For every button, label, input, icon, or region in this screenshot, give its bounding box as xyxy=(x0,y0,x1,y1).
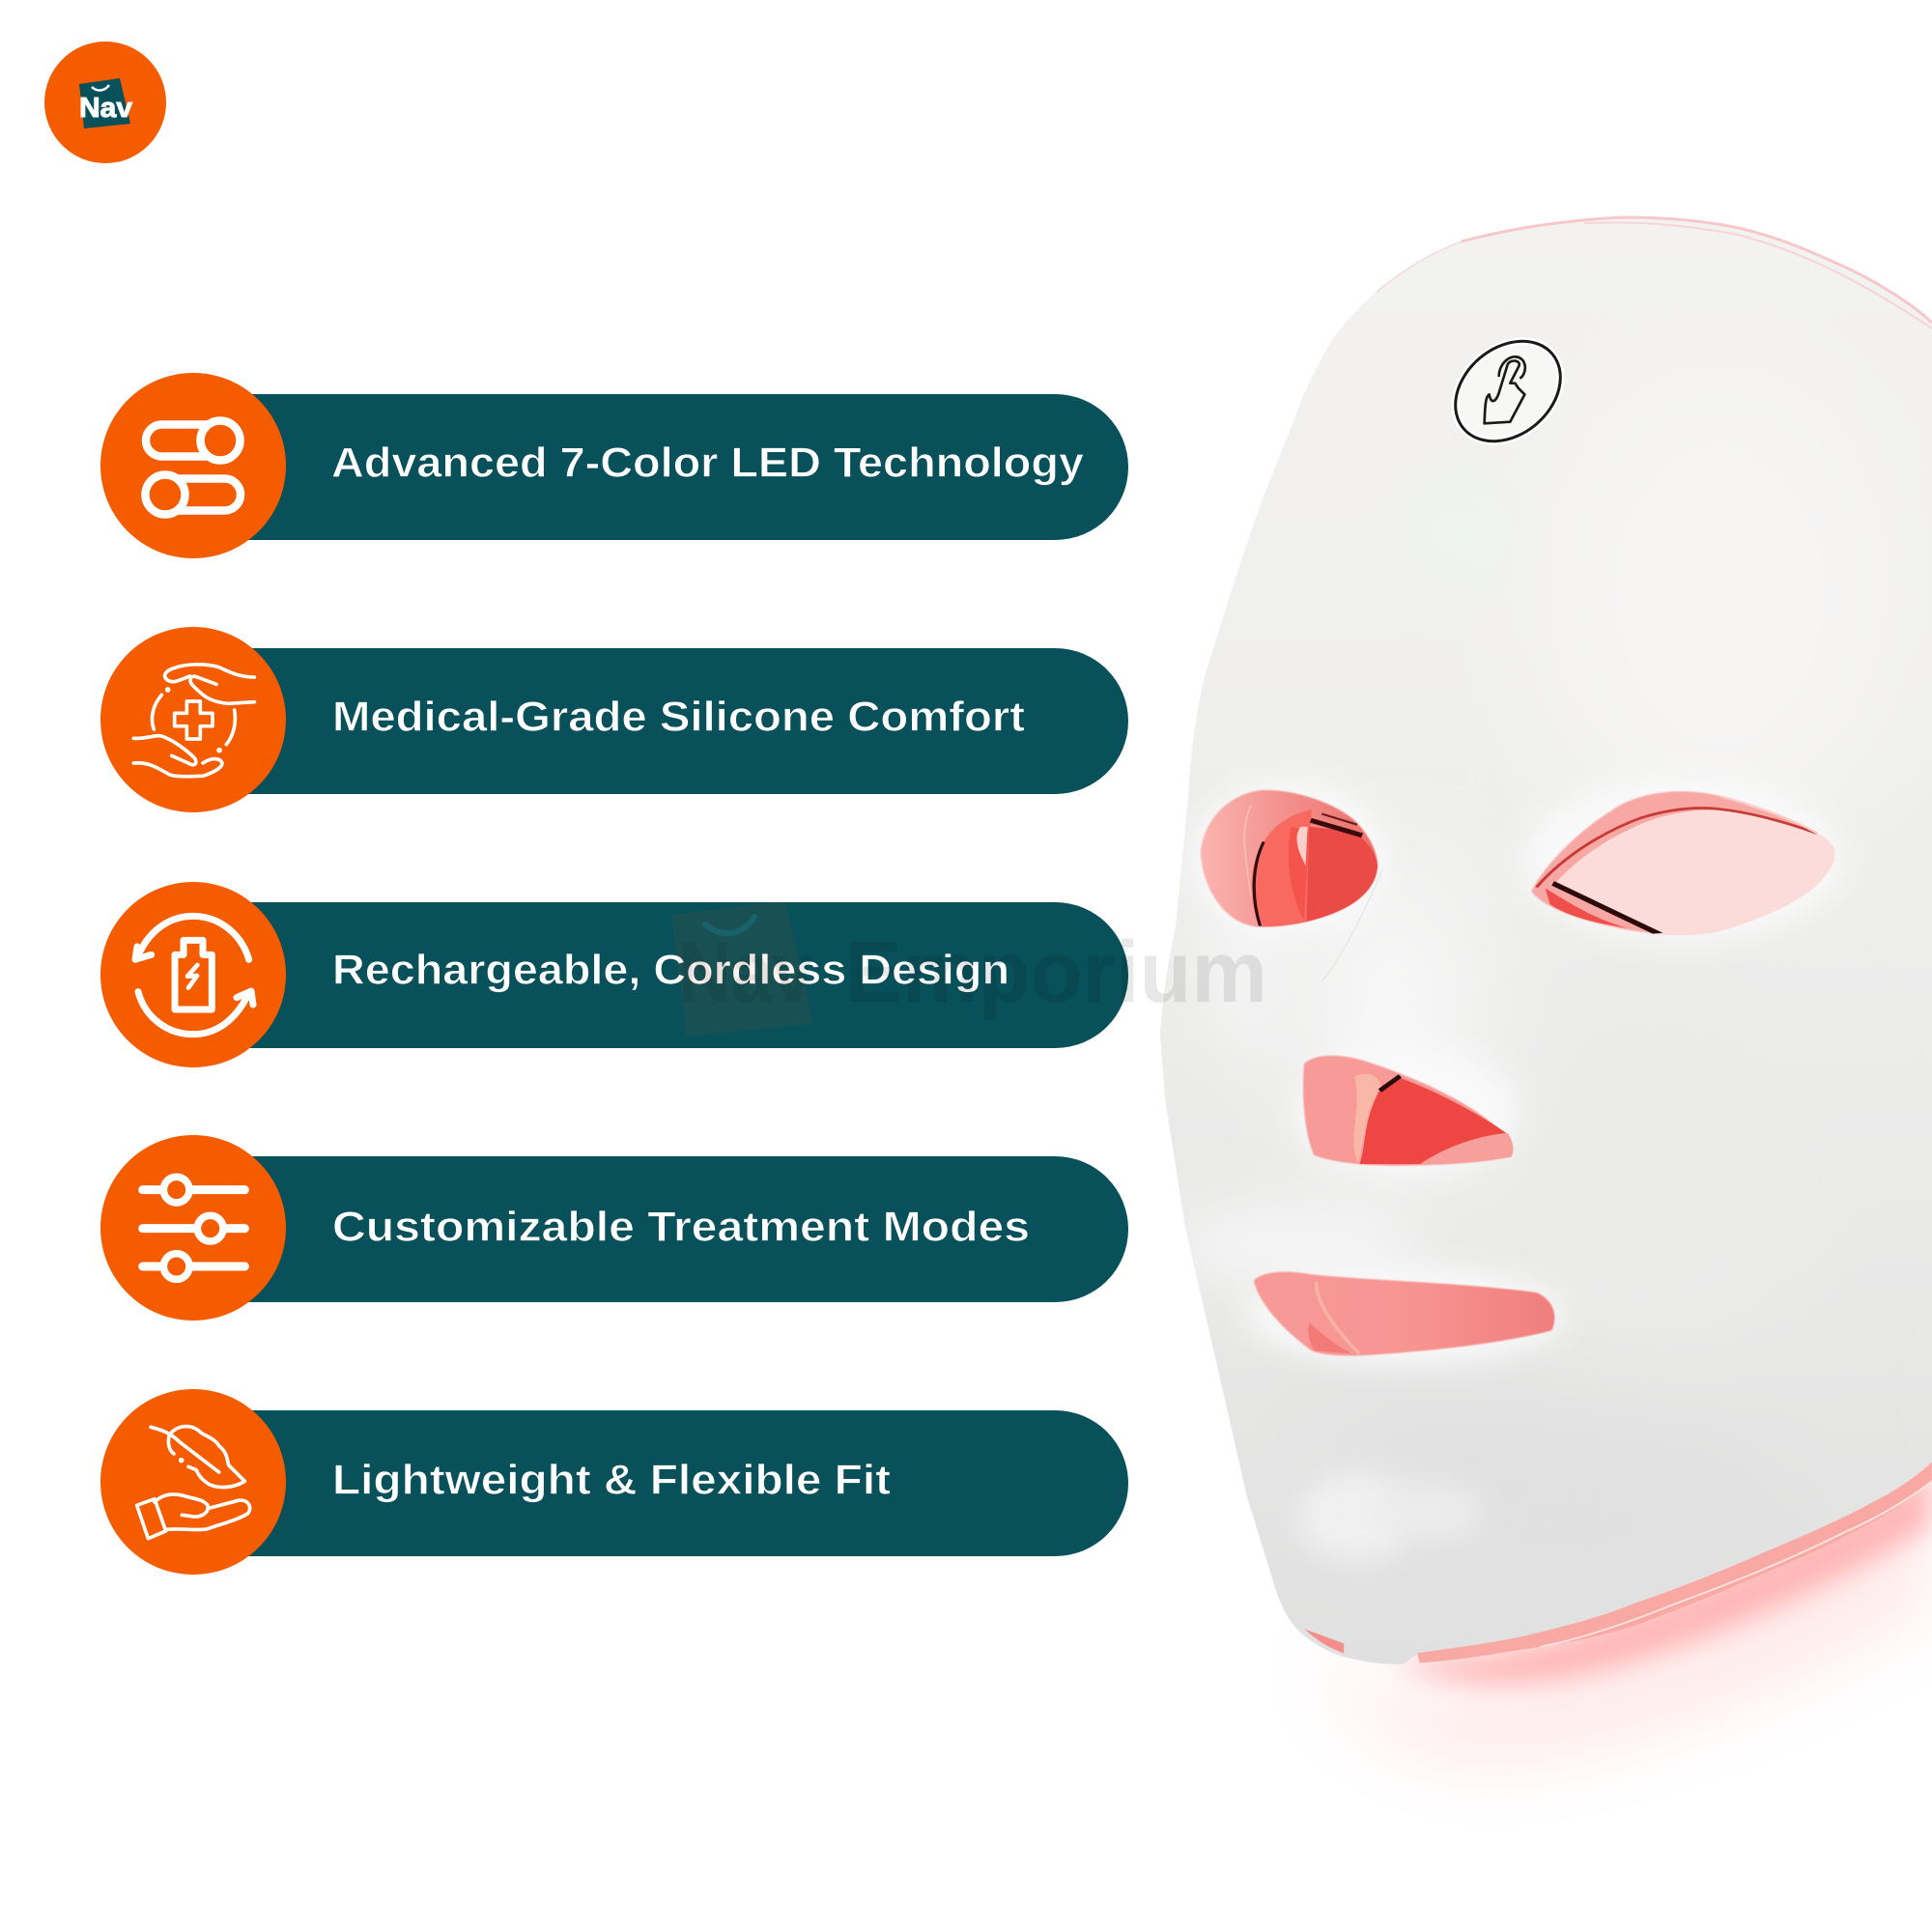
feature row 1: LED technology xyxy=(100,373,1128,558)
mouth opening xyxy=(1254,1272,1554,1355)
touch button icon xyxy=(1435,321,1580,462)
lower pink rim of mask xyxy=(1305,1462,1932,1662)
icon: battery with cycle arrows xyxy=(135,916,253,1035)
red glow under mask xyxy=(1314,1463,1932,1763)
logo square xyxy=(79,78,130,128)
logo smile xyxy=(92,85,109,91)
feature row 3: rechargeable xyxy=(100,882,1128,1067)
mask body xyxy=(1150,208,1932,1676)
watermark: Nav Emporium xyxy=(671,900,1267,1037)
logo badge xyxy=(44,42,166,163)
feature row 5: lightweight fit xyxy=(100,1389,1128,1575)
pill background xyxy=(193,648,1128,794)
icon circle xyxy=(100,1389,286,1575)
icon: hands with medical cross xyxy=(133,665,254,777)
pill background xyxy=(193,1156,1128,1302)
logo wordmark: Nav xyxy=(79,93,132,124)
pill background xyxy=(193,902,1128,1048)
icon: sliders xyxy=(143,1177,244,1279)
nose opening xyxy=(1303,1056,1513,1166)
icon circle xyxy=(100,373,286,558)
pill background xyxy=(193,394,1128,540)
label text: Rechargeable, Cordless Design xyxy=(332,947,1009,993)
icon circle xyxy=(100,627,286,812)
label text: Advanced 7-Color LED Technology xyxy=(331,439,1085,487)
label text: Medical-Grade Silicone Comfort xyxy=(332,694,1025,740)
feature row 4: treatment modes xyxy=(100,1135,1128,1321)
right eye opening xyxy=(1531,791,1834,935)
label text: Customizable Treatment Modes xyxy=(332,1204,1030,1250)
icon: toggles xyxy=(145,421,241,514)
left eye opening xyxy=(1201,790,1382,982)
pink top rim of mask xyxy=(1377,217,1932,328)
icon circle xyxy=(100,1135,286,1321)
watermark smile xyxy=(703,915,755,933)
icon circle xyxy=(100,882,286,1067)
feature row 2: silicone comfort xyxy=(100,627,1128,812)
pill background xyxy=(193,1410,1128,1556)
watermark word Nav: Nav xyxy=(678,924,813,1021)
icon: feather over open hand xyxy=(137,1427,250,1539)
panel: LED face mask xyxy=(1150,208,1932,1763)
label text: Lightweight & Flexible Fit xyxy=(332,1457,891,1503)
watermark word Emporium: Emporium xyxy=(845,924,1267,1021)
